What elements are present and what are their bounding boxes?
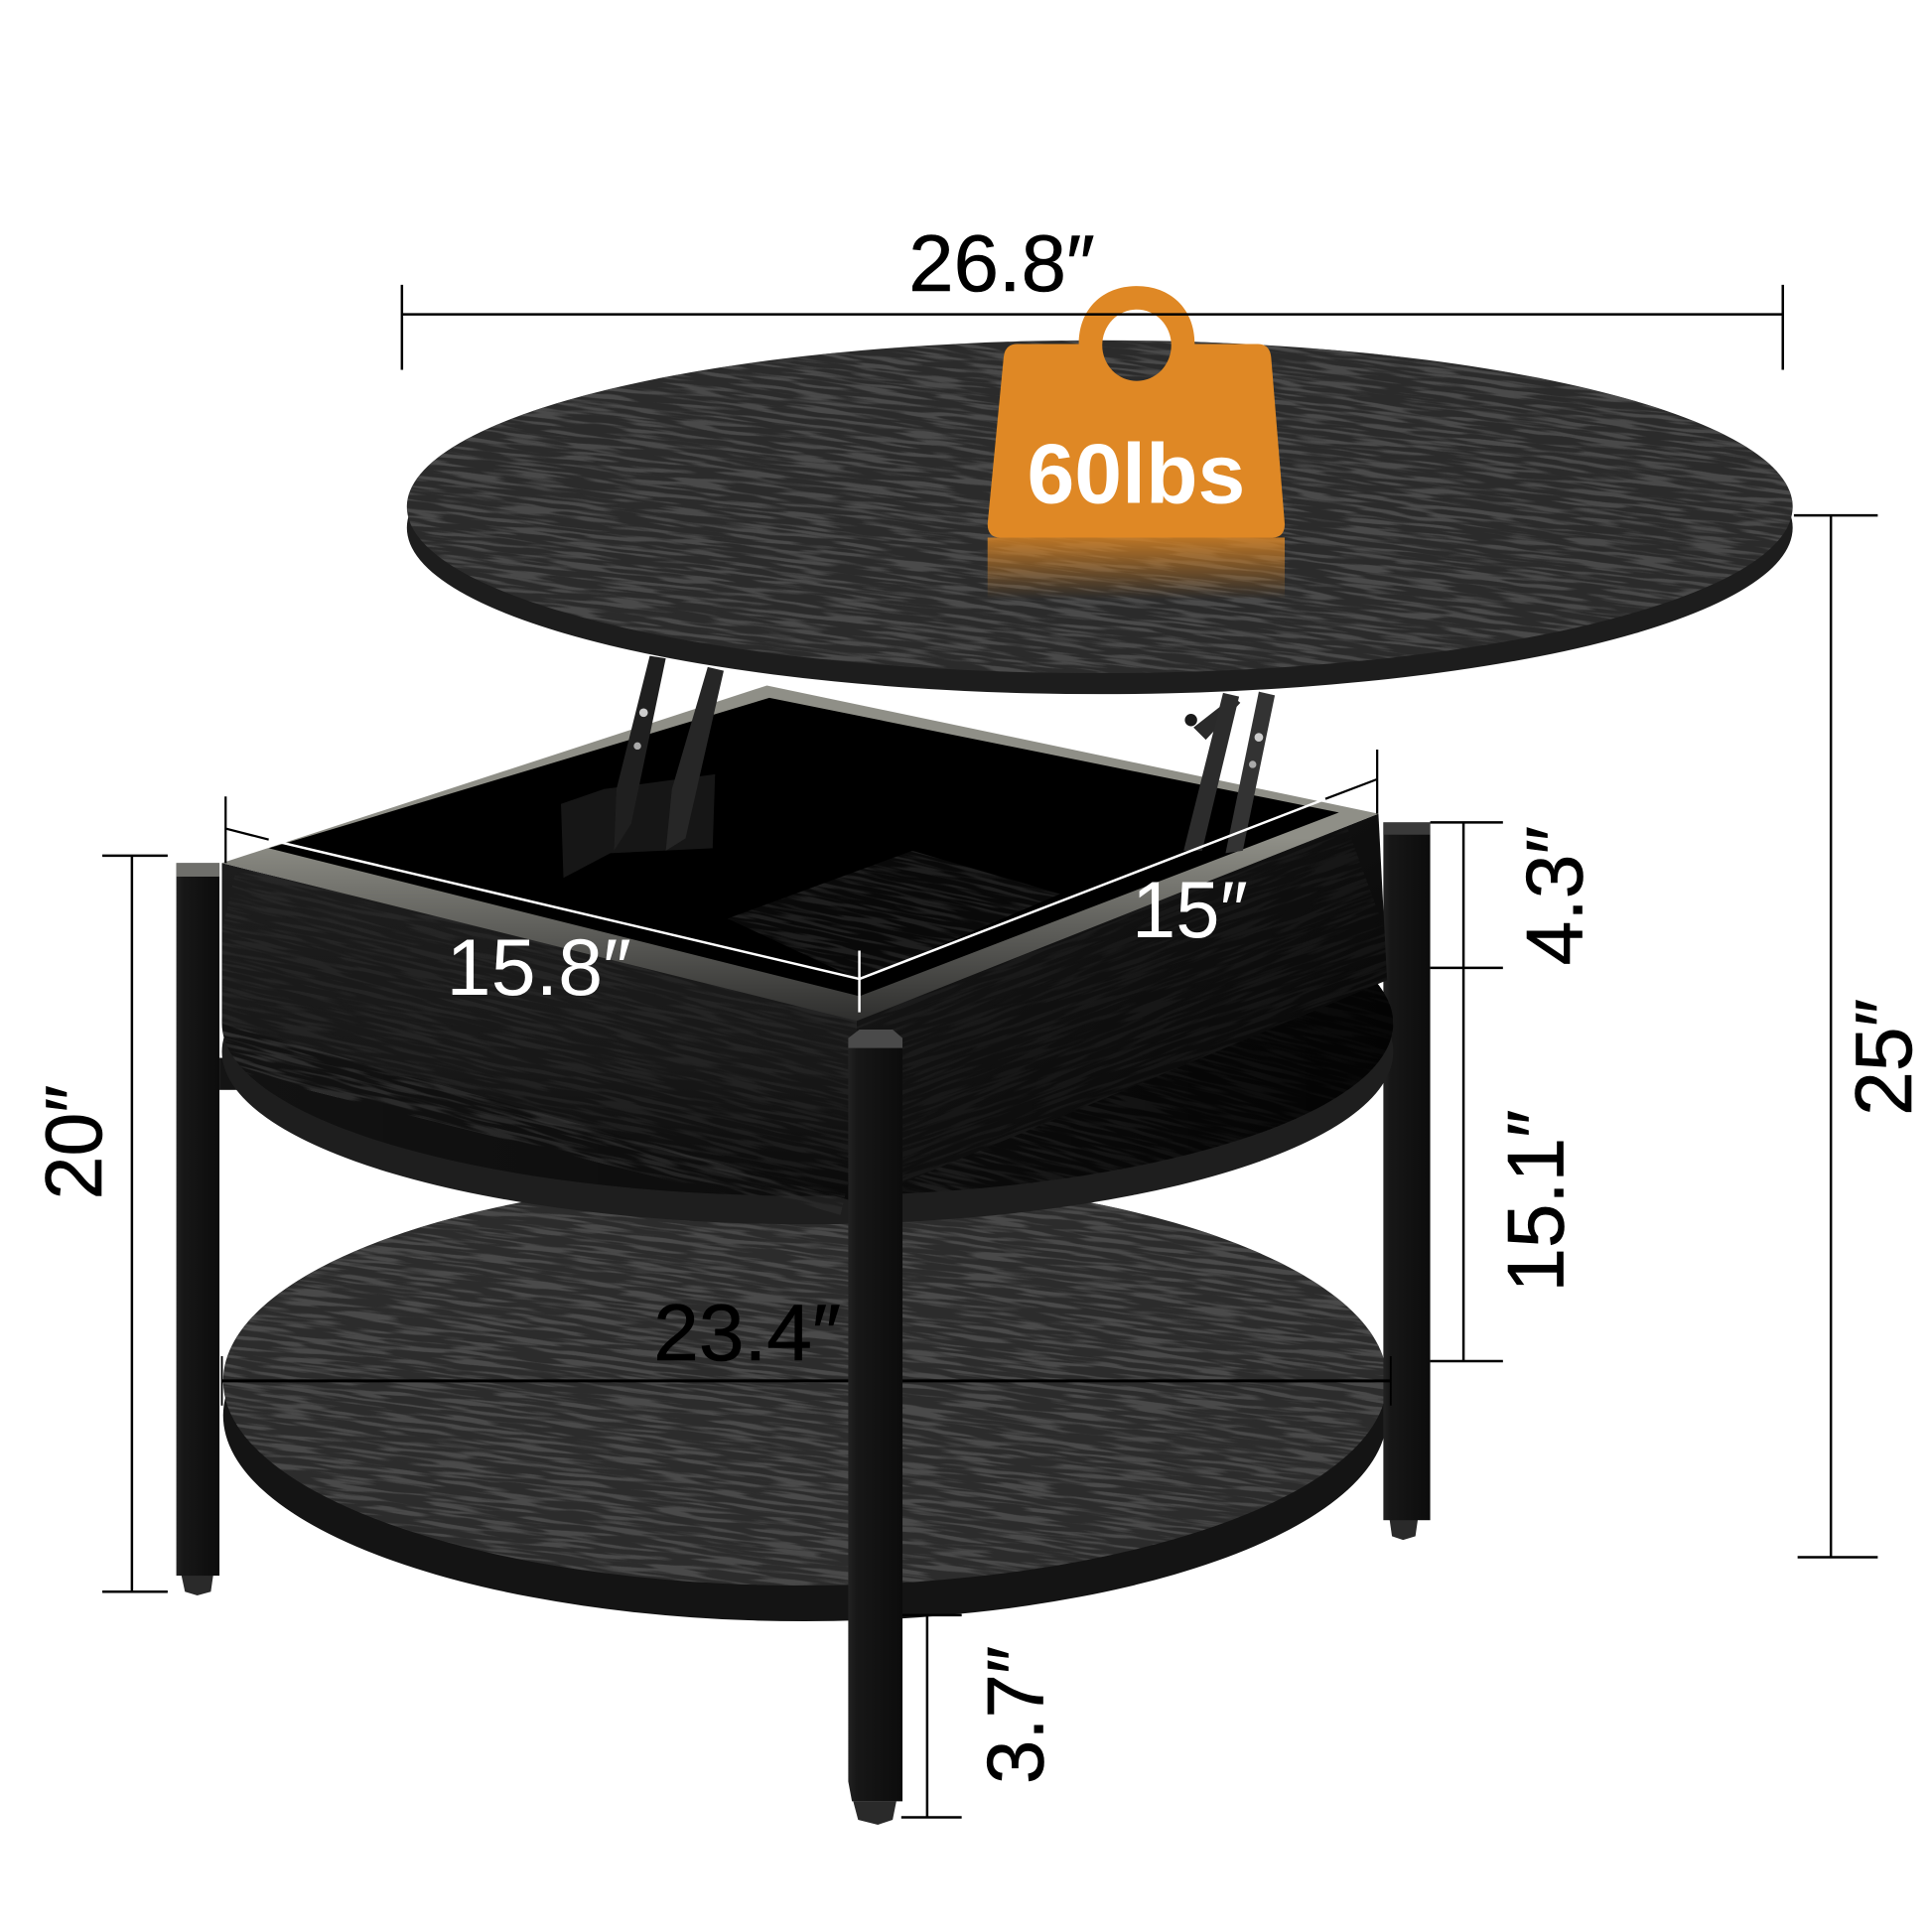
weight label: 60lbs	[1027, 427, 1245, 522]
table top	[407, 340, 1793, 695]
middle shelf	[222, 984, 1394, 1224]
interior floor	[728, 851, 1060, 977]
dimension: lowered height 20: 20″	[30, 1085, 119, 1199]
right lift bracket	[1183, 692, 1275, 853]
back left leg	[177, 863, 236, 1595]
dimension: heights 4.3 and 15.1	[1431, 822, 1599, 1361]
dimension: total height 25	[1794, 515, 1929, 1557]
lower shelf	[222, 1202, 1384, 1621]
dimension: lowered height 20	[30, 856, 168, 1591]
left wall	[222, 863, 857, 1214]
dimension: table top width 26.8: 26.8″	[908, 219, 1095, 309]
storage interior	[269, 698, 1339, 996]
dimension: lower shelf 23.4	[222, 1289, 1391, 1406]
weight capacity icon: 60 lbs	[988, 286, 1285, 600]
storage box	[222, 685, 1387, 1214]
dimension: heights 4.3 and 15.1: 15.1″	[1492, 1110, 1582, 1292]
dimension: storage length 15.8	[225, 796, 860, 1013]
storage rim	[222, 685, 1378, 1021]
left lift bracket	[561, 656, 724, 878]
front leg	[848, 1030, 902, 1825]
dimension: table top width 26.8	[402, 219, 1783, 370]
dimension: clearance 3.7	[901, 1615, 1061, 1818]
dimension: clearance 3.7: 3.7″	[972, 1646, 1061, 1784]
dimension: storage length 15.8: 15.8″	[447, 923, 631, 1013]
dimension: total height 25: 25″	[1840, 999, 1929, 1116]
dimension: storage width 15	[860, 750, 1377, 979]
weight reflection	[988, 537, 1285, 600]
back right leg	[1383, 822, 1431, 1540]
dimension: storage width 15: 15″	[1132, 866, 1248, 955]
right wall	[857, 814, 1387, 1181]
dimension: heights 4.3 and 15.1: 4.3″	[1510, 826, 1599, 965]
weight shape	[988, 286, 1285, 537]
dimension: lower shelf 23.4: 23.4″	[653, 1289, 841, 1378]
infographic: coffee table dimensions	[45, 234, 1912, 1825]
